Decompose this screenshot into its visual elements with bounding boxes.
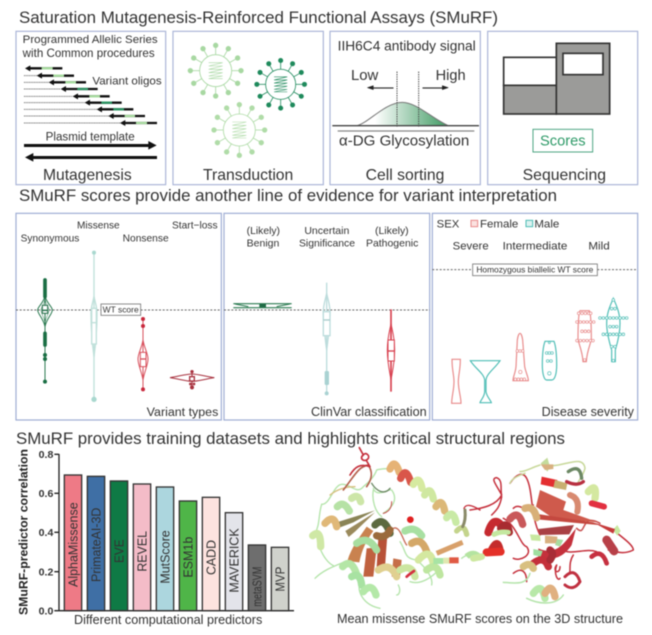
bar labels	[66, 502, 287, 607]
bar labels: MAVERICK	[227, 528, 241, 593]
label: start-loss: Start−loss	[172, 220, 218, 231]
label: uncertain significance	[299, 226, 355, 250]
right domain	[470, 458, 633, 603]
axis	[332, 124, 479, 128]
left beta sheet	[333, 510, 402, 577]
WT line	[16, 308, 221, 311]
y axis title: SMuRF-predictor correlation	[17, 449, 31, 615]
bar labels: MutScore	[158, 530, 172, 584]
label: benign: (Likely)	[247, 226, 280, 237]
scores box: Scores	[540, 134, 586, 150]
text: plasmid template: Plasmid template	[46, 132, 135, 144]
panel: mutagenesis	[16, 31, 166, 185]
icon: pale virus top	[188, 43, 244, 99]
icon: dark virus	[254, 58, 307, 111]
bar labels: REVEL	[135, 531, 149, 572]
bar: MVP	[271, 547, 289, 611]
y axis ticks: 0.2	[39, 567, 54, 578]
bar: ESM1b	[179, 501, 197, 611]
legend: sex: Female	[480, 219, 518, 231]
arrow: plasmid reverse	[25, 153, 157, 162]
arrow: plasmid forward	[24, 141, 157, 150]
panel: variant types	[16, 213, 221, 420]
label: intermediate: Intermediate	[503, 241, 567, 253]
bar labels: ESM1b	[181, 537, 195, 578]
bar labels: AlphaMissense	[66, 502, 80, 587]
text: glycosylation: α-DG Glycosylation	[339, 134, 469, 150]
violin: uncertain	[323, 283, 330, 395]
arrow: high	[423, 86, 448, 90]
label: uncertain significance: Uncertain	[304, 226, 350, 237]
text: antibody signal: IIH6C4 antibody signal	[338, 39, 476, 54]
bar: metaSVM	[248, 545, 266, 611]
text: common procedures: with Common procedures	[22, 47, 155, 60]
caption: variant types: Variant types	[147, 405, 218, 419]
bar labels: metaSVM	[250, 567, 264, 607]
caption: disease severity: Disease severity	[542, 405, 635, 419]
text: variant oligos: Variant oligos	[92, 75, 162, 87]
label: transduction: Transduction	[203, 167, 293, 184]
WT line	[224, 308, 430, 311]
curve: glycosylation distribution	[357, 102, 448, 126]
y axis ticks: 0.4	[39, 528, 54, 539]
panel: clinvar classification	[224, 213, 430, 420]
text: programmed allelic series: Programmed Allelic Series	[23, 34, 158, 46]
bar: MutScore	[156, 487, 174, 611]
violins: severe	[452, 359, 500, 403]
protein structure	[313, 448, 633, 608]
label: uncertain significance: Significance	[299, 239, 355, 250]
panel: transduction	[173, 31, 323, 185]
bar labels: EVE	[112, 539, 126, 563]
heading: second row: SMuRF scores provide another line of evidence for variant interpretation	[19, 186, 557, 205]
violin: pathogenic	[387, 309, 395, 392]
bars	[64, 475, 289, 611]
bar: AlphaMissense	[64, 475, 82, 611]
icon: flow cell	[504, 43, 610, 114]
bar: PrimateAI-3D	[87, 476, 105, 611]
right strands	[530, 458, 621, 559]
label: nonsense: Nonsense	[123, 234, 169, 245]
violin: start-loss	[170, 370, 214, 389]
bar labels: MVP	[273, 567, 287, 592]
legend: sex	[437, 219, 559, 231]
left loops	[315, 468, 480, 608]
y axis ticks: 0.6	[39, 489, 54, 500]
bar chart	[17, 449, 294, 627]
label: high: High	[436, 68, 466, 84]
bar: EVE	[110, 481, 128, 611]
right helices	[473, 469, 614, 598]
long helix	[390, 464, 467, 534]
left domain	[313, 448, 481, 608]
WT line	[432, 268, 638, 271]
left helices	[313, 496, 440, 595]
label: mild: Mild	[588, 241, 610, 253]
label: pathogenic: (Likely)	[375, 226, 409, 237]
violin: synonymous	[38, 280, 52, 384]
violin: benign	[233, 304, 292, 308]
red spots	[407, 516, 414, 523]
x axis title: Different computational predictors	[74, 613, 262, 627]
label: low: Low	[351, 68, 379, 84]
panel: cell sorting	[330, 31, 480, 185]
bar: REVEL	[133, 484, 151, 611]
label: severe: Severe	[453, 241, 489, 253]
label: pathogenic: Pathogenic	[366, 239, 418, 250]
label: missense: Missense	[77, 220, 120, 231]
left strands	[433, 542, 481, 561]
y axis ticks: 0.8	[39, 450, 54, 461]
label: mutagenesis: Mutagenesis	[43, 167, 132, 184]
scores box	[533, 129, 593, 152]
bar: MAVERICK	[225, 513, 243, 611]
y axis ticks	[39, 450, 54, 617]
legend: sex: SEX	[437, 219, 460, 231]
WT score label: WT score	[103, 305, 139, 315]
label: homozygous biallelic WT score: Homozygous biallelic WT score	[476, 264, 594, 274]
bar labels: CADD	[204, 540, 218, 575]
label: pathogenic	[366, 226, 418, 250]
legend: sex: Male	[534, 219, 559, 231]
label: cell sorting: Cell sorting	[366, 167, 444, 184]
gates	[397, 72, 419, 127]
violins: mild	[576, 298, 628, 362]
panel: disease severity	[432, 213, 638, 420]
label: benign	[247, 226, 280, 250]
violins: intermediate	[513, 333, 557, 381]
variant oligos arrows	[24, 65, 157, 126]
heading: third row: SMuRF provides training datasets and highlights critical structural regions	[16, 429, 565, 448]
label: synonymous: Synonymous	[21, 234, 79, 245]
label: benign: Benign	[247, 239, 280, 250]
bar: CADD	[202, 497, 220, 611]
caption: protein structure: Mean missense SMuRF scores on the 3D structure	[337, 611, 623, 626]
bar labels: PrimateAI-3D	[89, 508, 103, 582]
arrow: low	[367, 86, 393, 90]
caption: clinvar classification: ClinVar classification	[311, 405, 427, 419]
label: sequencing: Sequencing	[523, 167, 606, 184]
violin: nonsense	[138, 317, 148, 391]
panel: sequencing	[488, 31, 638, 185]
icon: pale virus bottom	[211, 102, 267, 158]
title: Saturation Mutagenesis-Reinforced Functional Assays (SMuRF)	[19, 8, 498, 27]
right loops	[470, 461, 633, 603]
tan and red loops	[343, 465, 371, 490]
y axis ticks: 0.0	[39, 606, 54, 617]
violin: missense	[91, 251, 97, 402]
